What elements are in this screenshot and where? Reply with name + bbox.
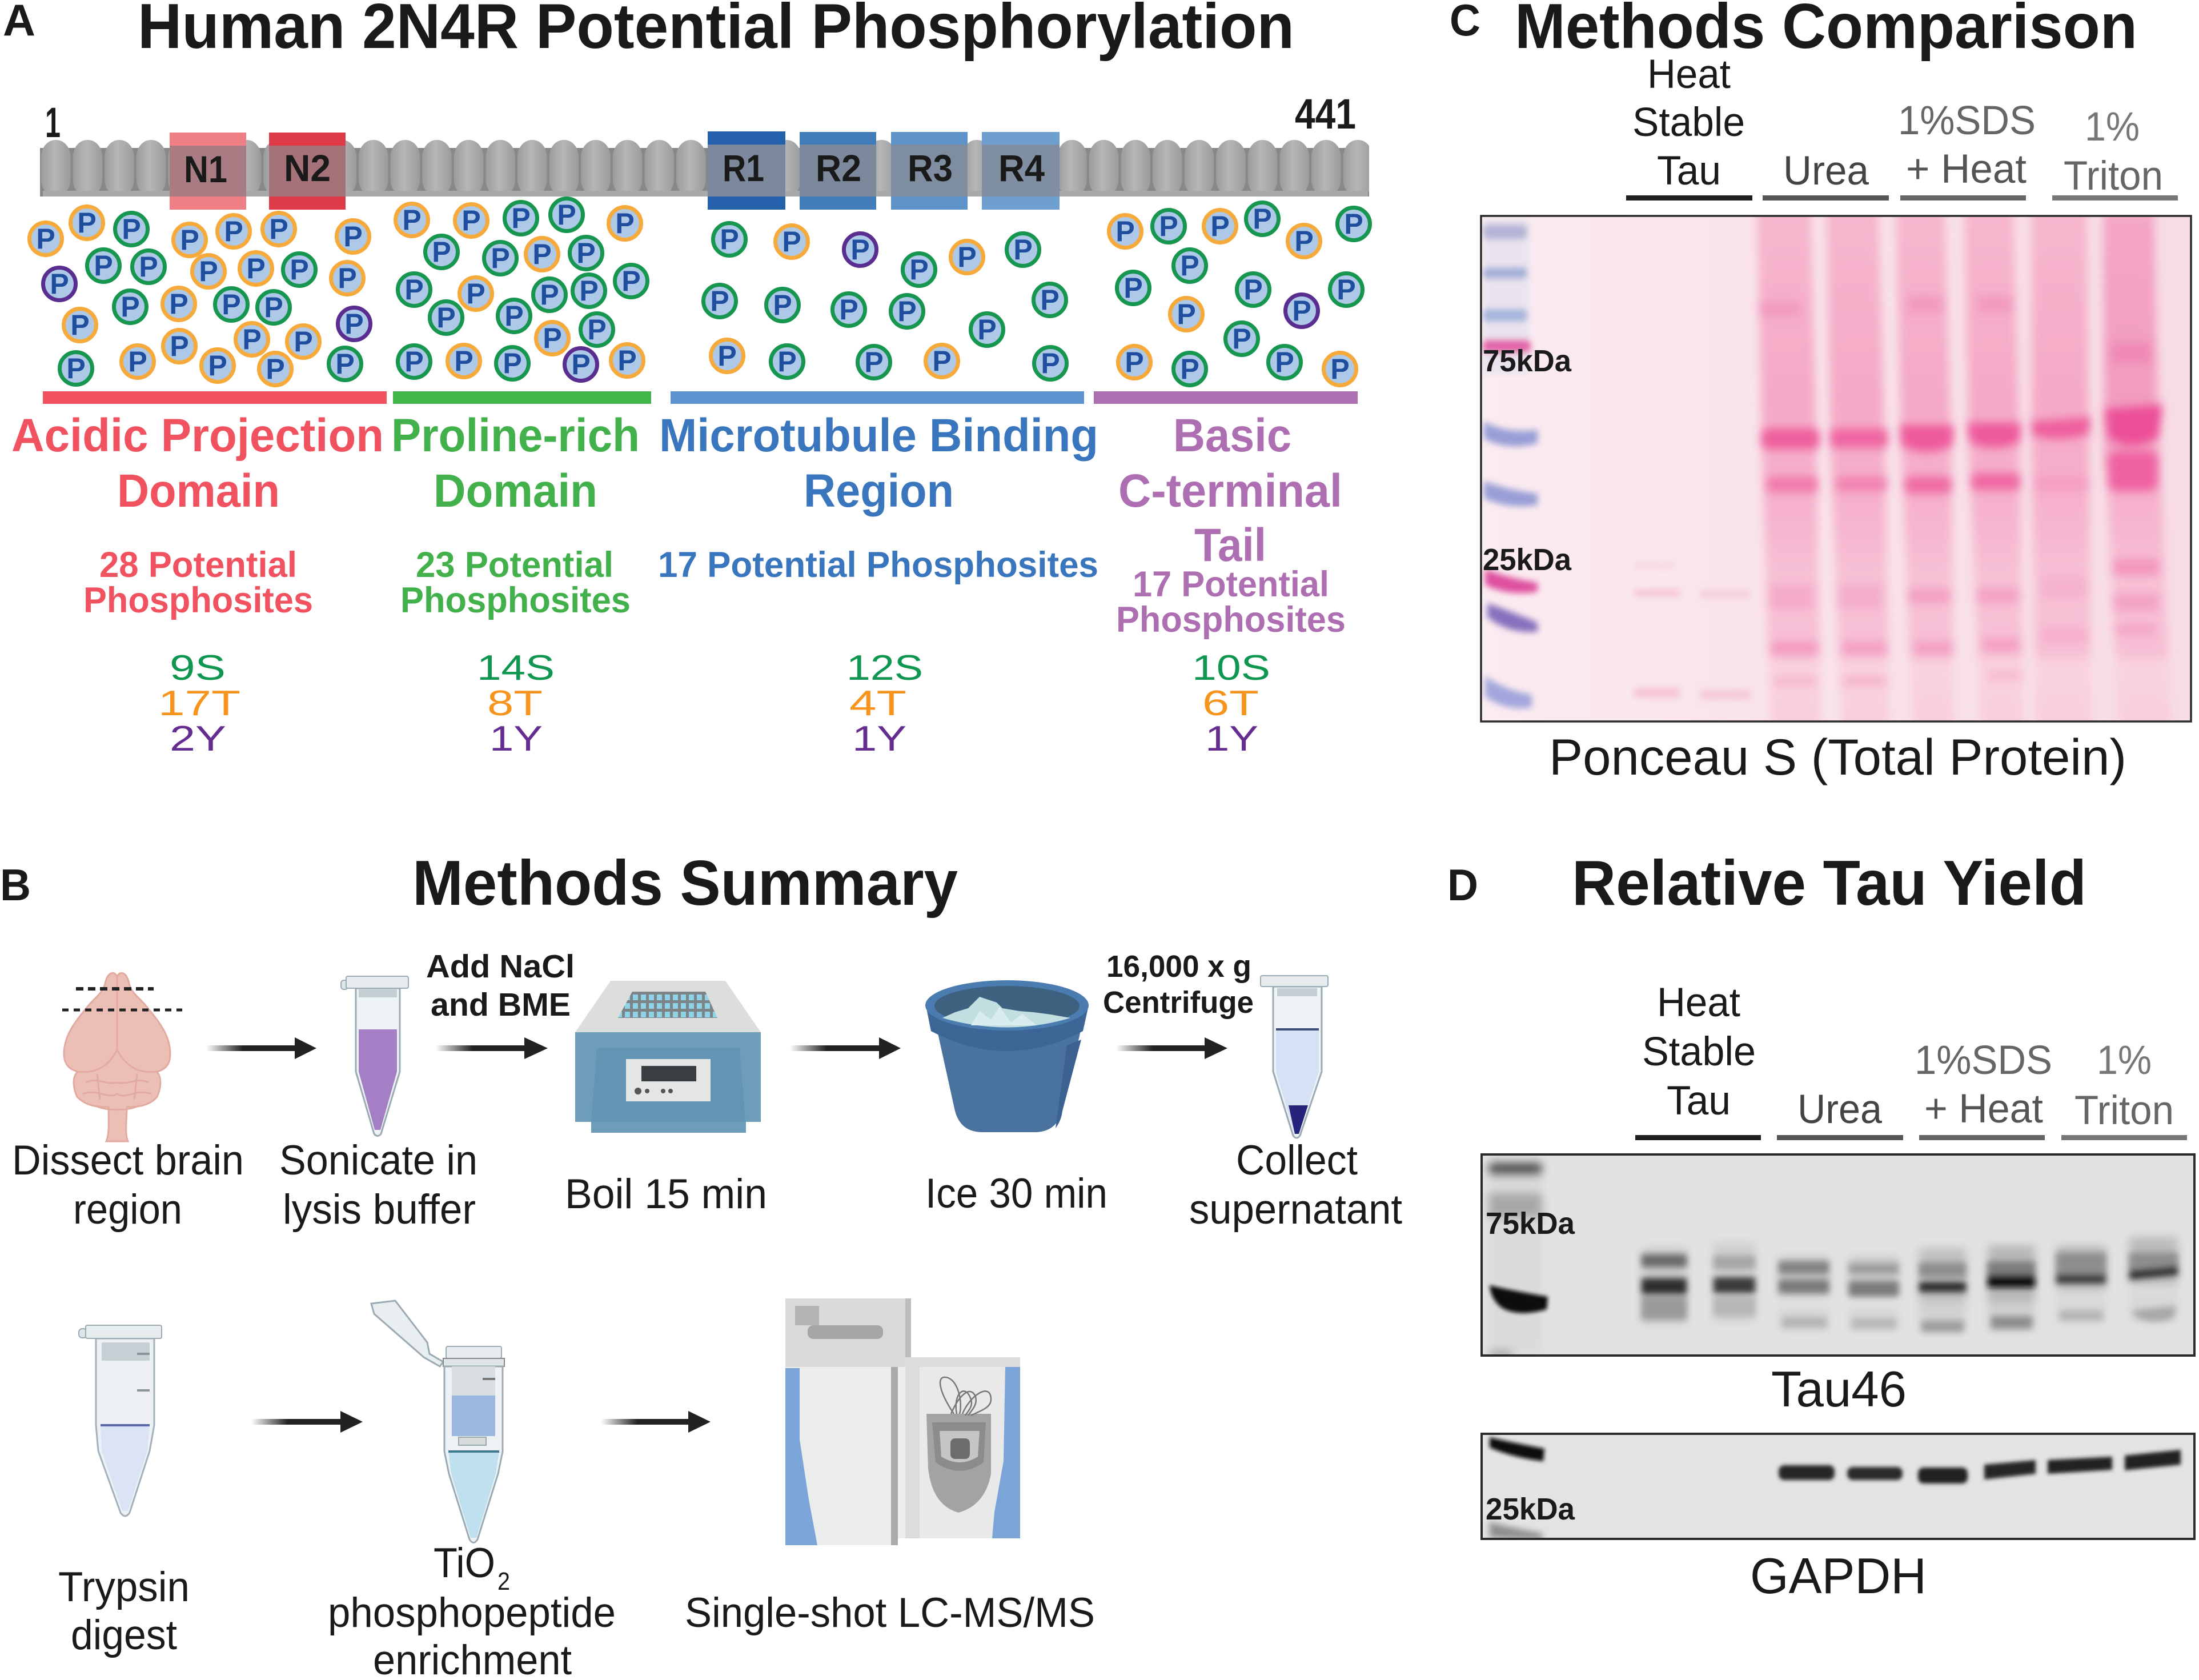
phosphosites: acidic projection domain: P <box>121 291 140 323</box>
phosphosites: microtubule binding region: P <box>957 241 977 273</box>
column: proline-rich domain text: 8T <box>487 684 543 723</box>
column: proline-rich domain text: Phosphosites <box>400 580 631 620</box>
phosphosites: acidic projection domain: P <box>222 288 241 320</box>
blot lane smears <box>1642 1237 2178 1331</box>
lane header: heat stable tau: Heat <box>1657 980 1740 1025</box>
lane header: heat stable tau: Stable <box>1632 100 1745 145</box>
phosphosites: acidic projection domain: P <box>77 207 97 239</box>
caption: TiO2 phosphopeptide enrichment: phosphopeptide <box>328 1590 616 1636</box>
phosphosites: proline-rich domain: P <box>404 346 424 378</box>
phosphosites: basic C-terminal tail: P <box>1243 274 1263 306</box>
lane header: heat stable tau: Tau <box>1667 1078 1731 1124</box>
phosphosites: acidic projection domain: P <box>36 223 55 255</box>
label: Add NaCl and BME <box>426 948 575 1023</box>
protein bands <box>1760 296 2162 687</box>
phosphosites: proline-rich domain: P <box>587 314 607 346</box>
caption: Trypsin digest: Trypsin <box>58 1564 190 1610</box>
column: acidic projection domain text: Phosphosites <box>83 580 313 620</box>
caption: GAPDH: GAPDH <box>1750 1547 1927 1604</box>
phosphosites: microtubule binding region: P <box>782 226 801 258</box>
caption: Boil 15 min: Boil 15 min <box>565 1171 767 1217</box>
phosphosites: proline-rich domain: P <box>504 300 524 332</box>
lane header: 1% triton: 1% <box>2097 1038 2152 1083</box>
phosphosites: acidic projection domain: P <box>122 213 141 245</box>
faint heat stable lanes <box>1634 563 1751 699</box>
phosphosites: basic C-terminal tail <box>1109 202 1370 385</box>
phosphosites: microtubule binding region: P <box>839 294 858 326</box>
phosphosites: proline-rich domain: P <box>491 242 510 274</box>
phosphosites: microtubule binding region: P <box>710 285 729 317</box>
domain R3 <box>891 132 968 210</box>
phosphosites: proline-rich domain: P <box>576 237 596 269</box>
caption: Sonicate in lysis buffer: lysis buffer <box>283 1186 476 1233</box>
arrow 1 <box>206 1037 316 1059</box>
panel D: relative tau yield <box>1447 848 2194 1604</box>
phosphosites: acidic projection domain: P <box>50 268 69 300</box>
caption: Collect supernatant: supernatant <box>1189 1186 1402 1233</box>
column: microtubule binding region text <box>658 410 1098 759</box>
phosphosites: acidic projection domain: P <box>246 252 266 284</box>
label: 16,000 x g Centrifuge: Centrifuge <box>1103 985 1254 1020</box>
lane header: 1% triton <box>2061 1038 2187 1140</box>
panel B: methods summary workflow <box>0 848 1402 1680</box>
label: 16,000 x g Centrifuge <box>1103 949 1254 1020</box>
phosphosites: acidic projection domain: P <box>66 352 86 384</box>
domain R2 <box>800 132 876 210</box>
phosphosites: acidic projection domain: P <box>338 262 357 294</box>
phosphosites: proline-rich domain: P <box>579 275 599 307</box>
blot bands <box>1642 1253 2178 1332</box>
phosphosites: acidic projection domain: P <box>180 224 199 256</box>
phosphosites: proline-rich domain: P <box>511 202 531 234</box>
column: basic C-terminal tail text: Basic <box>1173 410 1291 462</box>
protein bead chain <box>40 140 1369 197</box>
caption: Sonicate in lysis buffer: Sonicate in <box>279 1137 477 1184</box>
phosphosites: basic C-terminal tail: P <box>1125 346 1144 378</box>
phosphosites: microtubule binding region: P <box>909 254 929 286</box>
column: basic C-terminal tail text: Tail <box>1194 519 1266 571</box>
phosphosites: acidic projection domain: P <box>294 326 313 358</box>
caption: TiO2 phosphopeptide enrichment: TiO <box>434 1540 495 1586</box>
column: microtubule binding region text: 12S <box>846 648 923 688</box>
phosphosites: proline-rich domain: P <box>503 347 522 379</box>
icon: brain <box>62 973 182 1141</box>
phosphosites: proline-rich domain: P <box>436 302 456 334</box>
lane header: urea <box>1763 149 1889 201</box>
column: basic C-terminal tail text: C-terminal <box>1118 465 1342 517</box>
lane header: heat stable tau: Heat <box>1647 52 1731 97</box>
residue label 1: 1 <box>45 99 61 146</box>
phosphosites: microtubule binding region: P <box>897 295 917 327</box>
domain N1 <box>170 133 246 210</box>
caption: Dissect brain region: region <box>73 1186 182 1233</box>
phosphosites: microtubule binding region: P <box>932 345 952 377</box>
caption: Tau46: Tau46 <box>1771 1361 1907 1417</box>
domain R3: R3 <box>908 147 953 189</box>
column: basic C-terminal tail text: Phosphosites <box>1116 600 1346 640</box>
Tau46 western blot <box>1482 1154 2194 1358</box>
phosphosites: acidic projection domain: P <box>335 348 355 380</box>
phosphosites: acidic projection domain: P <box>242 323 262 355</box>
domain R2: R2 <box>816 147 861 189</box>
marker label 25kDa: 25kDa <box>1486 1492 1575 1526</box>
blot ladder <box>1488 1160 1542 1358</box>
phosphosites: basic C-terminal tail: P <box>1210 210 1230 242</box>
phosphosites: microtubule binding region: P <box>1040 284 1060 316</box>
phosphosites: proline-rich domain: P <box>543 322 562 354</box>
phosphosites: proline-rich domain: P <box>402 204 422 236</box>
lane header: 1% triton: Triton <box>2074 1088 2174 1133</box>
phosphosites: basic C-terminal tail: P <box>1159 210 1178 242</box>
marker label 75kDa: 75kDa <box>1483 344 1572 378</box>
phosphosites: proline-rich domain: P <box>462 205 481 236</box>
icon: heat block <box>575 981 761 1133</box>
caption: Trypsin digest <box>58 1564 190 1658</box>
lane header: 1% triton: Triton <box>2064 154 2163 199</box>
column: proline-rich domain text: Proline-rich <box>391 410 640 462</box>
phosphosites: basic C-terminal tail: P <box>1180 250 1199 282</box>
phosphosites: basic C-terminal tail: P <box>1330 353 1350 385</box>
caption: Ponceau S (Total Protein): Ponceau S (Total Protein) <box>1549 728 2126 785</box>
phosphosites: microtubule binding region: P <box>773 289 792 321</box>
lane header: 1% SDS + heat <box>1915 1038 2052 1140</box>
caption: Dissect brain region: Dissect brain <box>12 1137 244 1184</box>
phosphosites: microtubule binding region: P <box>777 346 797 378</box>
caption: Dissect brain region <box>12 1137 244 1233</box>
phosphosites: microtubule binding region: P <box>717 340 737 372</box>
domain bar: proline-rich <box>393 391 651 404</box>
column: basic C-terminal tail text: 17 Potential <box>1133 564 1329 604</box>
panel A: tau phosphorylation map <box>3 0 1370 759</box>
phosphosites: microtubule binding region: P <box>1041 347 1060 379</box>
phosphosites: acidic projection domain: P <box>208 350 227 382</box>
phosphosites: microtubule binding region: P <box>850 234 870 266</box>
panel C: methods comparison <box>1450 0 2191 785</box>
column: acidic projection domain text: 9S <box>170 648 226 688</box>
column: basic C-terminal tail text: 10S <box>1192 648 1270 688</box>
phosphosites: acidic projection domain: P <box>269 213 288 245</box>
lane header: 1% SDS + heat: + Heat <box>1924 1086 2043 1132</box>
column: proline-rich domain text <box>391 410 640 759</box>
phosphosites: acidic projection domain: P <box>139 251 158 283</box>
column: basic C-terminal tail text <box>1116 410 1346 759</box>
caption: TiO2 phosphopeptide enrichment: 2 <box>497 1567 510 1595</box>
arrow 2 <box>436 1037 548 1059</box>
lane header: 1% triton <box>2052 105 2178 201</box>
phosphosites: proline-rich domain: P <box>617 344 637 376</box>
phosphosites: proline-rich domain: P <box>432 236 451 268</box>
phosphosites: acidic projection domain: P <box>94 250 113 282</box>
phosphosites: basic C-terminal tail: P <box>1253 203 1272 235</box>
phosphosites: microtubule binding region: P <box>720 223 739 255</box>
phosphosites: proline-rich domain: P <box>454 345 473 377</box>
domain N1: N1 <box>184 148 227 190</box>
lane header: 1% SDS + heat <box>1898 98 2036 201</box>
GAPDH western blot <box>1482 1434 2194 1540</box>
column: basic C-terminal tail text: 1Y <box>1205 719 1258 759</box>
title: Methods Summary: Methods Summary <box>412 848 958 919</box>
column: acidic projection domain text: Domain <box>117 465 280 517</box>
phosphosites: acidic projection domain: P <box>70 309 90 341</box>
column: microtubule binding region text: 1Y <box>852 719 906 759</box>
caption: Collect supernatant <box>1189 1137 1402 1233</box>
phosphosites: basic C-terminal tail: P <box>1180 353 1199 385</box>
phosphosites: basic C-terminal tail: P <box>1294 225 1314 257</box>
column: proline-rich domain text: 1Y <box>489 719 543 759</box>
phosphosites: microtubule binding region <box>704 223 1067 379</box>
phosphosites: acidic projection domain: P <box>128 346 147 378</box>
domain N2 <box>269 133 346 210</box>
title: Relative Tau Yield: Relative Tau Yield <box>1572 848 2086 919</box>
lane header: 1% SDS + heat: + Heat <box>1906 147 2027 192</box>
phosphosites: acidic projection domain: P <box>169 288 188 320</box>
lane header: 1% triton: 1% <box>2085 105 2140 150</box>
column: microtubule binding region text: 17 Potential Phosphosites <box>658 545 1098 585</box>
lane header: heat stable tau <box>1626 52 1752 201</box>
lane header: heat stable tau <box>1635 980 1761 1140</box>
phosphosites: basic C-terminal tail: P <box>1337 274 1356 306</box>
domain R4: R4 <box>998 147 1045 189</box>
column: proline-rich domain text: Domain <box>434 465 597 517</box>
caption: Trypsin digest: digest <box>71 1612 177 1658</box>
phosphosites: acidic projection domain: P <box>290 254 309 286</box>
phosphosites: acidic projection domain: P <box>170 330 189 362</box>
lane header: heat stable tau: Tau <box>1657 149 1721 194</box>
marker label 25kDa: 25kDa <box>1483 543 1572 577</box>
column: acidic projection domain text: 17T <box>158 684 240 723</box>
label: Add NaCl and BME: Add NaCl <box>426 948 575 985</box>
column: proline-rich domain text: 14S <box>477 648 555 688</box>
phosphosites: proline-rich domain: P <box>557 199 576 231</box>
phosphosites: proline-rich domain: P <box>621 265 641 297</box>
lane header: urea: Urea <box>1783 149 1869 194</box>
phosphosites: proline-rich domain: P <box>615 207 635 239</box>
phosphosites: proline-rich domain: P <box>466 278 485 310</box>
caption: Sonicate in lysis buffer <box>279 1137 477 1233</box>
phosphosites: proline-rich domain: P <box>540 279 559 311</box>
phosphosites: microtubule binding region: P <box>864 346 884 378</box>
column: microtubule binding region text: Region <box>804 465 954 517</box>
caption: TiO2 phosphopeptide enrichment <box>328 1540 616 1680</box>
column: acidic projection domain text: 28 Potential <box>99 545 297 585</box>
phosphosites: microtubule binding region: P <box>977 314 997 346</box>
marker label 75kDa: 75kDa <box>1486 1206 1575 1241</box>
protein lanes <box>1757 200 2172 737</box>
phosphosites: basic C-terminal tail: P <box>1344 208 1363 240</box>
column: proline-rich domain text: 23 Potential <box>416 545 613 585</box>
label: 16,000 x g Centrifuge: 16,000 x g <box>1106 949 1251 984</box>
phosphosites: acidic projection domain: P <box>266 353 285 385</box>
molecular weight ladder <box>1483 220 1538 708</box>
phosphosites: acidic projection domain: P <box>264 291 283 323</box>
caption: Collect supernatant: Collect <box>1236 1137 1358 1184</box>
phosphosites: microtubule binding region: P <box>1013 234 1033 266</box>
label: Add NaCl and BME: and BME <box>431 987 571 1023</box>
phosphosites: proline-rich domain: P <box>532 238 552 270</box>
panel letter B: B <box>0 860 31 910</box>
icon: ice bucket <box>925 980 1089 1132</box>
residue label 441: 441 <box>1295 90 1356 138</box>
column: basic C-terminal tail text: 6T <box>1202 684 1259 723</box>
column: microtubule binding region text: Microtubule Binding <box>659 410 1098 462</box>
phosphosites: proline-rich domain <box>395 199 648 380</box>
domain R1: R1 <box>723 147 764 189</box>
phosphosites: acidic projection domain <box>30 207 370 385</box>
icon: tube with purple lysate <box>341 976 408 1136</box>
phosphosites: basic C-terminal tail: P <box>1292 295 1311 327</box>
icon: tube with supernatant <box>1261 976 1328 1138</box>
domain R4 <box>982 132 1060 210</box>
column: acidic projection domain text: Acidic Projection <box>11 410 384 462</box>
phosphosites: proline-rich domain: P <box>404 274 424 306</box>
icon: LC-MS/MS instrument <box>785 1298 1020 1545</box>
caption: Ice 30 min: Ice 30 min <box>925 1170 1107 1217</box>
phosphosites: acidic projection domain: P <box>343 220 363 252</box>
phosphosites: basic C-terminal tail: P <box>1177 298 1196 330</box>
icon: trypsin digest tube <box>79 1325 162 1516</box>
lane header: 1% SDS + heat: 1%SDS <box>1915 1038 2052 1083</box>
icon: TiO2 enrichment tube with spin column <box>371 1301 504 1542</box>
phosphosites: basic C-terminal tail: P <box>1123 272 1143 304</box>
dissection cut lines <box>62 989 182 1010</box>
lane header: urea <box>1777 1087 1903 1140</box>
phosphosites: acidic projection domain: P <box>199 255 218 287</box>
phosphosites: basic C-terminal tail: P <box>1232 323 1251 355</box>
arrow 6 <box>601 1411 711 1433</box>
caption: Single-shot LC-MS/MS: Single-shot LC-MS/MS <box>685 1590 1095 1636</box>
domain bar: microtubule binding <box>671 391 1084 404</box>
panel letter D: D <box>1447 860 1478 910</box>
column: acidic projection domain text: 2Y <box>170 719 226 759</box>
phosphosites: acidic projection domain: P <box>344 308 364 340</box>
arrow 5 <box>251 1411 363 1433</box>
lane header: heat stable tau: Stable <box>1642 1029 1756 1074</box>
phosphosites: basic C-terminal tail: P <box>1275 346 1294 378</box>
Ponceau S blot <box>1481 200 2191 737</box>
arrow 4 <box>1116 1037 1227 1059</box>
column: microtubule binding region text: 4T <box>849 684 906 723</box>
lane header: urea: Urea <box>1797 1087 1882 1132</box>
domain bar: acidic <box>43 391 387 404</box>
domain N2: N2 <box>284 147 331 189</box>
domain R1 <box>708 131 785 210</box>
arrow 3 <box>790 1037 901 1059</box>
column: acidic projection domain text <box>11 410 384 759</box>
lane header: 1% SDS + heat: 1%SDS <box>1898 98 2036 143</box>
phosphosites: proline-rich domain: P <box>571 348 591 380</box>
domain bar: C-terminal <box>1094 391 1358 404</box>
phosphosites: basic C-terminal tail: P <box>1115 215 1135 247</box>
phosphosites: acidic projection domain: P <box>224 215 243 247</box>
